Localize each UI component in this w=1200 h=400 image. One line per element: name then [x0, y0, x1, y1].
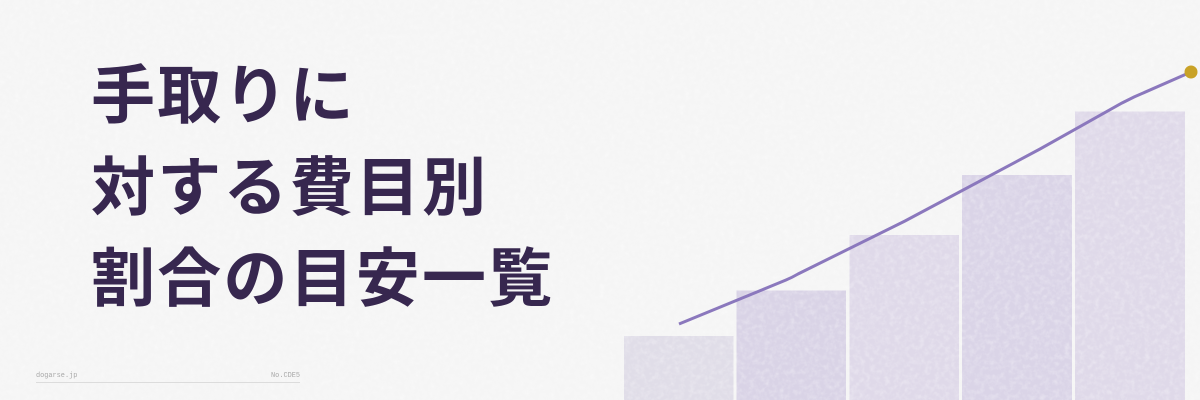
title [91, 60, 554, 315]
bar 4 [962, 175, 1072, 400]
bar 5 [1075, 112, 1185, 400]
trend line [679, 72, 1191, 324]
bar 3 [850, 235, 959, 400]
bar 2 [736, 290, 846, 400]
footer: site name and number: dogarse.jp [36, 372, 77, 380]
bar 1 [624, 336, 734, 400]
title: 手取りに [91, 60, 356, 132]
end point dot [1184, 66, 1198, 78]
footer: site name and number: No.CDE5 [271, 372, 300, 380]
footer: site name and number [36, 370, 300, 383]
title: 割合の目安一覧 [91, 243, 554, 315]
title: 対する費目別 [91, 152, 488, 224]
